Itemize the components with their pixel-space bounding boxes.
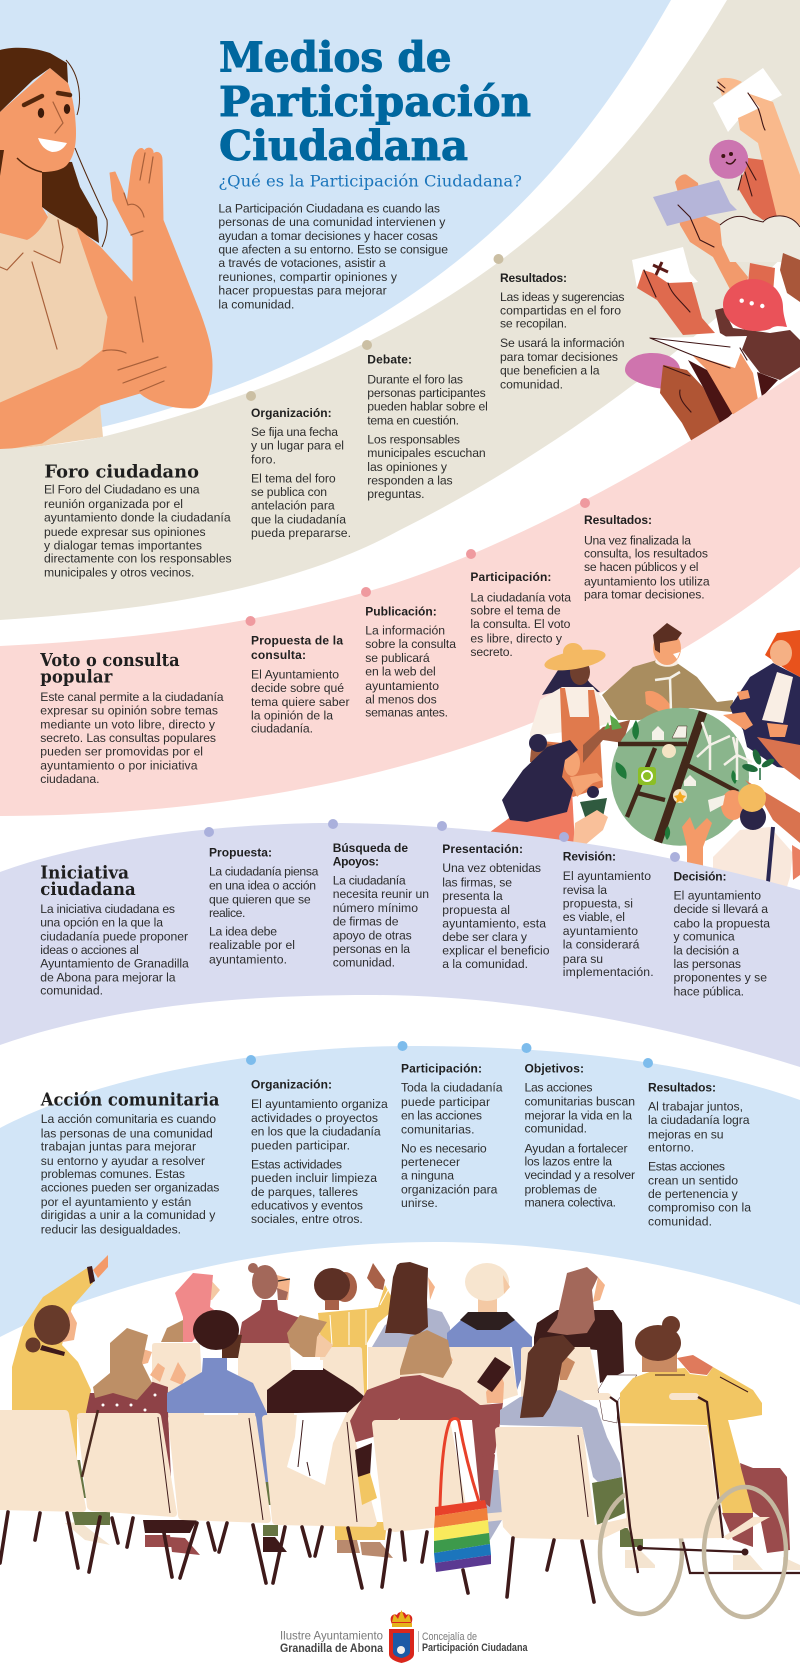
step: Objetivos (524, 1061, 635, 1210)
title: Participación (219, 78, 531, 126)
step: Organización: en los que la ciudadanía (251, 1124, 381, 1138)
step: Resultados: que beneficien a la (500, 363, 600, 377)
step dots (246, 1041, 653, 1068)
man in blue shirt (167, 1310, 267, 1413)
step: Propuesta: ayuntamiento. (209, 953, 287, 967)
text block: iniciativa: ciudadanía puede proponer (40, 930, 188, 944)
step: Objetivos: Las acciones (524, 1081, 592, 1095)
step: Decisión: cabo la propuesta (674, 916, 770, 930)
text block: intro: a través de votaciones, asistir a (218, 256, 386, 270)
text block: intro: la comunidad. (218, 297, 294, 311)
step: Resultados: mejoras en su (648, 1127, 724, 1141)
illustration: raised hands with speech bubbles (625, 68, 800, 442)
step: Resultados (500, 271, 624, 392)
jacket draped on chair (287, 1412, 377, 1505)
text block: voto: pueden ser promovidas por el (40, 744, 203, 758)
step: Objetivos: vecindad y a resolver (524, 1168, 635, 1182)
text block: foro: directamente con los responsables (44, 552, 232, 566)
man in yellow raising hand (12, 1255, 108, 1420)
step: Resultados: Estas acciones (648, 1160, 725, 1174)
text block: acción: las personas de una comunidad (41, 1126, 213, 1140)
step: Revisión: Revisión: (563, 849, 616, 863)
text block: iniciativa (40, 902, 189, 998)
title: Medios de (219, 34, 452, 82)
step: Propuesta de la consulta: decide sobre qué (251, 681, 344, 695)
step: Búsqueda de Apoyos (333, 841, 429, 969)
step: Publicación: ayuntamiento (365, 679, 439, 693)
step: Presentación: Una vez obtenidas (442, 861, 541, 875)
step: Publicación: semanas antes. (365, 706, 448, 720)
step: Objetivos: comunidad. (524, 1122, 587, 1136)
step: Publicación: en la web del (365, 665, 436, 679)
woman with navy hair and coral dress (490, 734, 608, 845)
step: Organización: se publica con (251, 485, 327, 499)
step: Presentación: explicar el beneficio (442, 944, 550, 958)
step: Publicación (365, 604, 456, 720)
step: Presentación: ayuntamiento, esta (442, 917, 546, 931)
text block: acción: dirigidas a unir a la comunidad y (41, 1208, 216, 1222)
text block: iniciativa: de Abona para mejorar la (40, 971, 176, 985)
man in black with white collar (267, 1315, 365, 1413)
text block: acción: reducir las desigualdades. (41, 1222, 181, 1236)
icon: coat of arms (389, 1610, 414, 1663)
step: Participación: puede participar (401, 1095, 490, 1109)
woman with long brown hair, dark sweater (534, 1267, 624, 1383)
wheelchair seat back and frame (581, 1393, 800, 1573)
step: Resultados: compromiso con la (648, 1201, 751, 1215)
step: Organización: actividades o proyectos (251, 1111, 378, 1125)
text block: voto: secreto. Las consultas populares (40, 731, 216, 745)
step: Organización: que la ciudadanía (251, 513, 346, 527)
man with bun and glasses (238, 1263, 300, 1347)
green map circle (611, 708, 752, 846)
step: Resultados: se recopilan. (500, 317, 567, 331)
text block: intro: personas de una comunidad intervienen y (218, 215, 446, 229)
legs and feet (65, 1470, 800, 1570)
step: Participación: Participación: (470, 570, 551, 584)
step: Organización: Se fija una fecha (251, 425, 338, 439)
step: Objetivos: Objetivos: (524, 1061, 584, 1075)
woman in maroon with phone (345, 1330, 511, 1507)
person in wheelchair (620, 1316, 790, 1553)
step: Decisión: la decisión a (674, 944, 739, 958)
step dots (204, 819, 680, 862)
step: Publicación: al menos dos (365, 692, 437, 706)
step: Resultados (648, 1080, 751, 1229)
step: Resultados: para tomar decisiones. (584, 588, 705, 602)
step dots (246, 498, 590, 626)
step: Participación: comunitarias. (401, 1122, 474, 1136)
step: Decisión: hace pública. (674, 985, 744, 999)
step: Organización: sociales, entre otros. (251, 1212, 363, 1226)
text block: voto: expresar su opinión sobre temas (40, 703, 218, 717)
panel: Iniciativa ciudadana (0, 819, 800, 1067)
step: Resultados: comunidad. (500, 378, 563, 392)
text block: iniciativa: una opción en la que la (40, 915, 163, 929)
step: Participación: secreto. (470, 645, 513, 659)
man in tan sweater (602, 623, 733, 720)
step: Participación: No es necesario (401, 1141, 487, 1155)
clothing slivers between chairs (68, 1410, 271, 1505)
rear wheel (600, 1490, 682, 1614)
woman with red hair and navy jacket (723, 630, 800, 770)
step: Debate: responden a las (367, 474, 453, 488)
chair seam lines (82, 1410, 588, 1522)
heading: Voto o consulta popular: Voto o consulta (39, 650, 180, 671)
step: Organización: Organización: (251, 1078, 332, 1092)
step: Propuesta de la consulta: la opinión de la (251, 708, 333, 722)
step: Decisión: El ayuntamiento (674, 889, 761, 903)
step: Participación: sobre el tema de (470, 604, 561, 618)
text block: iniciativa: ideas o acciones al (40, 943, 139, 957)
step: Organización: antelación para (251, 498, 335, 512)
step: Revisión: El ayuntamiento (563, 869, 651, 883)
heading: Iniciativa ciudadana: ciudadana (40, 879, 136, 900)
step: Presentación: las firmas, se (442, 875, 512, 889)
step: Decisión (674, 870, 770, 999)
panel: Acción comunitaria (0, 1041, 800, 1337)
text block: voto: Este canal permite a la ciudadanía (40, 690, 224, 704)
step: Objetivos: mejorar la vida en la (524, 1108, 632, 1122)
subtitle: ¿Qué es la Participación Ciudadana? (218, 172, 522, 191)
step: Búsqueda de Apoyos: Apoyos: (333, 854, 379, 868)
text block: acción: su entorno y ayudar a resolver (41, 1154, 205, 1168)
text block: voto: ciudadana. (40, 772, 100, 786)
step: Resultados: de pertenencia y (648, 1187, 739, 1201)
text block: foro: El Foro del Ciudadano es una (44, 483, 200, 497)
step: Revisión: para su (563, 952, 603, 966)
text block: acción: acciones pueden ser organizadas (41, 1180, 219, 1194)
step: Participación (470, 570, 571, 659)
step: Participación: Toda la ciudadanía (401, 1081, 503, 1095)
text block: acción: trabajan juntas para mejorar (41, 1140, 196, 1154)
step: Propuesta de la consulta: consulta: (251, 648, 306, 662)
text block: foro: reunión organizada por el (44, 497, 183, 511)
step: Resultados: Se usará la información (500, 336, 624, 350)
title: Ciudadana (219, 122, 468, 170)
woman with straw hat and overalls (530, 643, 630, 797)
illustration: community around green map (490, 623, 800, 900)
step: Debate: Debate: (367, 353, 412, 367)
text block: foro (44, 483, 232, 580)
step: Organización: El tema del foro (251, 472, 336, 486)
step: Búsqueda de Apoyos: apoyo de otras (333, 929, 412, 943)
step: Propuesta: La ciudadanía piensa (209, 865, 319, 879)
step: Búsqueda de Apoyos: número mínimo (333, 901, 418, 915)
illustration: woman gesturing (0, 48, 212, 450)
step: Publicación: sobre la consulta (365, 637, 456, 651)
step dots (246, 254, 504, 401)
step: Organización: foro. (251, 453, 276, 467)
text: Ayuntamiento (280, 1629, 383, 1655)
text block: acción: por el ayuntamiento y están (41, 1195, 191, 1209)
step: Propuesta de la consulta: tema quiere saber (251, 695, 350, 709)
step: Organización: pueden participar. (251, 1139, 350, 1153)
text: Ayuntamiento: Granadilla de Abona (280, 1641, 383, 1655)
step: Propuesta: Propuesta: (209, 846, 272, 860)
text block: intro: que afecten a su entorno. Esto se consigue (218, 243, 448, 257)
text block: iniciativa: Ayuntamiento de Granadilla (40, 956, 189, 970)
step: Propuesta (209, 846, 319, 967)
text block: acción: problemas comunes. Estas (41, 1167, 185, 1181)
step: Publicación: se publicará (365, 651, 430, 665)
step: Búsqueda de Apoyos: comunidad. (333, 955, 395, 969)
text block: foro: puede expresar sus opiniones (44, 525, 206, 539)
step: Revisión (563, 849, 654, 979)
step: Propuesta de la consulta (251, 634, 350, 736)
step: Resultados: comunidad. (648, 1215, 712, 1229)
step: Propuesta de la consulta: Propuesta de la (251, 634, 343, 648)
step: Resultados (584, 513, 710, 602)
step: Organización: El ayuntamiento organiza (251, 1097, 388, 1111)
step: Revisión: implementación. (563, 965, 654, 979)
step: Debate: personas participantes (367, 386, 486, 400)
step: Resultados: Una vez finalizada la (584, 533, 691, 547)
heading: Voto o consulta popular: popular (40, 667, 113, 688)
text block: intro (218, 202, 448, 311)
illustration: seated audience (0, 1255, 800, 1617)
text block: iniciativa: comunidad. (40, 984, 103, 998)
step: Debate: las opiniones y (367, 460, 448, 474)
step: Resultados: la ciudadanía logra (648, 1113, 750, 1127)
step: Participación (401, 1061, 503, 1210)
step: Propuesta de la consulta: ciudadanía. (251, 722, 313, 736)
step: Revisión: la considerará (563, 937, 640, 951)
step: Participación: Participación: (401, 1061, 482, 1075)
text block: foro: municipales y otros vecinos. (44, 566, 194, 580)
step: Presentación: debe ser clara y (442, 930, 528, 944)
heading: Acción comunitaria: Acción comunitaria (40, 1090, 220, 1111)
step: Organización (251, 1078, 388, 1226)
step: Organización: y un lugar para el (251, 438, 344, 452)
step: Propuesta de la consulta: El Ayuntamiento (251, 668, 339, 682)
step: Decisión: decide si llevará a (674, 902, 768, 916)
step: Decisión: proponentes y se (674, 971, 767, 985)
step: Presentación: Presentación: (442, 842, 523, 856)
step: Organización: pueda prepararse. (251, 526, 351, 540)
front-row chairs 1 to 6 (0, 1410, 627, 1540)
rainbow tote bag (434, 1418, 491, 1572)
heading: Foro ciudadano: Foro ciudadano (44, 462, 199, 483)
text block: intro: reuniones, compartir opiniones y (218, 270, 398, 284)
step: Objetivos: manera colectiva. (524, 1196, 616, 1210)
step: Búsqueda de Apoyos: necesita reunir un (333, 887, 429, 901)
step: Participación: La ciudadanía vota (470, 590, 571, 604)
step: Organización: de parques, talleres (251, 1185, 358, 1199)
text block: voto: mediante un voto libre, directo y (40, 718, 216, 732)
text block: acción (41, 1112, 219, 1236)
step: Búsqueda de Apoyos: personas en la (333, 942, 410, 956)
step: Organización: Estas actividades (251, 1158, 342, 1172)
woman in hijab (161, 1273, 220, 1342)
heading: Iniciativa ciudadana (40, 862, 136, 900)
step: Revisión: revisa la (563, 883, 607, 897)
man raising hand, striped shirt (314, 1263, 397, 1400)
divider (417, 1631, 420, 1652)
step: Resultados: compartidas en el foro (500, 303, 621, 317)
heading: Iniciativa ciudadana: Iniciativa (40, 862, 129, 883)
step: Revisión: propuesta, si (563, 897, 633, 911)
right-side arms and plant (741, 737, 800, 843)
text: Concejalía: Concejalía de (422, 1631, 477, 1643)
step: Participación: organización para (401, 1183, 498, 1197)
text: Concejalía: Participación Ciudadana (422, 1642, 528, 1654)
person with white hair, blue sweater (447, 1263, 532, 1390)
step: Organización: pueden incluir limpieza (251, 1171, 377, 1185)
step: Decisión: y comunica (674, 930, 735, 944)
step: Resultados: crean un sentido (648, 1174, 738, 1188)
step: Organización: educativos y eventos (251, 1199, 363, 1213)
woman clapping, dotted dress (86, 1328, 186, 1415)
step: Presentación: presenta la (442, 889, 503, 903)
step: Participación: unirse. (401, 1196, 438, 1210)
text block: intro: hacer propuestas para mejorar (218, 284, 387, 298)
step: Presentación: a la comunidad. (442, 957, 528, 971)
heading: Voto o consulta popular (39, 650, 180, 688)
step: Organización (251, 406, 351, 540)
text: Ayuntamiento: Ilustre Ayuntamiento (280, 1629, 383, 1643)
step: Debate: tema en cuestión. (367, 414, 459, 428)
step: Propuesta: La idea debe (209, 925, 277, 939)
step: Debate: municipales escuchan (367, 446, 486, 460)
step: Propuesta: realice. (209, 906, 245, 920)
step: Publicación: La información (365, 624, 445, 638)
text block: voto (40, 690, 224, 786)
girl with yellow cap (682, 784, 800, 900)
chair legs (0, 1512, 594, 1602)
footer logos (280, 1610, 528, 1663)
step: Resultados: consulta, los resultados (584, 547, 708, 561)
woman with long dark hair, grey top (372, 1262, 450, 1347)
step: Debate: Los responsables (367, 433, 460, 447)
step: Participación: pertenecer (401, 1155, 460, 1169)
back-row people (161, 1262, 624, 1400)
step: Organización: Organización: (251, 406, 332, 420)
step: Participación: es libre, directo y (470, 631, 563, 645)
step: Presentación: propuesta al (442, 903, 510, 917)
step: Resultados: Resultados: (500, 271, 567, 285)
step: Resultados: para tomar decisiones (500, 350, 618, 364)
panel: Voto o consulta popular (0, 370, 800, 816)
step: Búsqueda de Apoyos: La ciudadanía (333, 874, 406, 888)
step: Debate: Durante el foro las (367, 373, 463, 387)
step: Objetivos: Ayudan a fortalecer (524, 1141, 628, 1155)
step: Debate: preguntas. (367, 487, 424, 501)
step: Debate: pueden hablar sobre el (367, 399, 488, 413)
step: Objetivos: problemas de (524, 1182, 597, 1196)
panel: Foro ciudadano (0, 0, 800, 620)
step: Revisión: es viable, el (563, 910, 625, 924)
step: Resultados: se hacen públicos y el (584, 560, 698, 574)
step: Debate (367, 353, 488, 501)
step: Participación: en las acciones (401, 1108, 482, 1122)
text block: voto: ayuntamiento o por iniciativa (40, 759, 198, 773)
text block: foro: ayuntamiento donde la ciudadanía (44, 511, 231, 525)
step: Decisión: las personas (674, 957, 741, 971)
step: Propuesta: en una idea o acción (209, 878, 316, 892)
step: Propuesta: realizable por el (209, 938, 295, 952)
panel: intro (0, 0, 671, 449)
step: Resultados: Resultados: (648, 1080, 716, 1094)
step: Presentación (442, 842, 550, 971)
step: Propuesta: que quieren que se (209, 893, 311, 907)
step: Decisión: Decisión: (674, 870, 726, 884)
step: Resultados: entorno. (648, 1141, 694, 1155)
step: Resultados: Las ideas y sugerencias (500, 290, 624, 304)
text block: intro: ayudan a tomar decisiones y hacer cosas (218, 229, 438, 243)
back-row chairs (152, 1343, 600, 1430)
text block: iniciativa: La iniciativa ciudadana es (40, 902, 175, 916)
step: Búsqueda de Apoyos: Búsqueda de (333, 841, 408, 855)
step: Objetivos: comunitarias buscan (524, 1095, 635, 1109)
step: Resultados: ayuntamiento los utiliza (584, 574, 710, 588)
step: Búsqueda de Apoyos: de firmas de (333, 915, 399, 929)
step: Objetivos: los lazos entre la (524, 1155, 612, 1169)
step: Resultados: Resultados: (584, 513, 652, 527)
woman in grey with long hair (500, 1335, 637, 1525)
front wheel (704, 1487, 786, 1617)
text block: foro: y dialogar temas importantes (44, 538, 202, 552)
step: Resultados: Al trabajar juntos, (648, 1100, 743, 1114)
title (219, 34, 531, 170)
step: Participación: la consulta. El voto (470, 617, 571, 631)
step: Publicación: Publicación: (365, 604, 437, 618)
text block: intro: La Participación Ciudadana es cuando las (218, 202, 440, 216)
text: Concejalía (422, 1631, 528, 1654)
step: Revisión: ayuntamiento (563, 924, 638, 938)
text block: acción: La acción comunitaria es cuando (41, 1112, 216, 1126)
step: Participación: a ninguna (401, 1168, 454, 1182)
